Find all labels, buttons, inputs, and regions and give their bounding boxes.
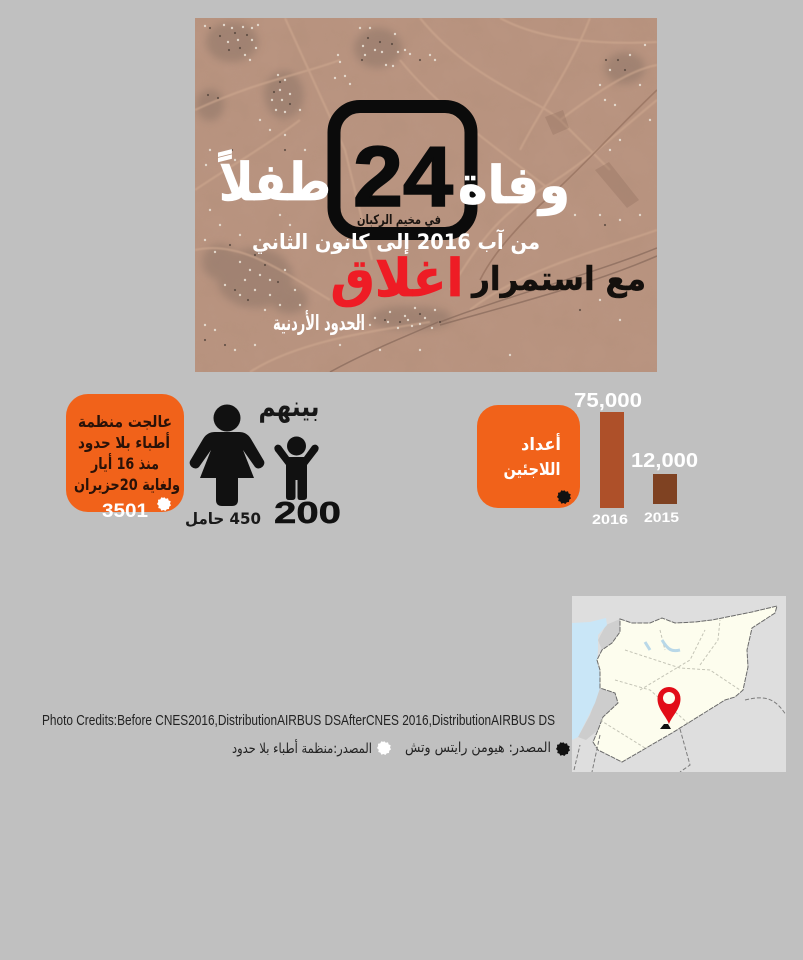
text: 200 children: 200 bbox=[274, 495, 341, 530]
number frame: rounded square with 24: 24 bbox=[353, 130, 453, 225]
panel: MSF treatment callout: منذ 16 أيار bbox=[90, 453, 159, 473]
panel: refugee numbers callout bbox=[477, 405, 580, 508]
panel: MSF treatment callout: عالجت منظمة bbox=[78, 412, 172, 431]
number frame: rounded square with 24 bbox=[334, 106, 471, 234]
text: in Rukban camp: في مخيم الركبان bbox=[357, 213, 441, 228]
location pin bbox=[657, 687, 681, 729]
text: date range: من آب 2016 إلى كانون الثاني bbox=[252, 229, 540, 254]
panel: map of Syria bbox=[572, 596, 786, 772]
heading: children: طفلاً bbox=[218, 149, 331, 213]
text: among them: بينهم bbox=[258, 390, 320, 423]
bar chart: refugees 2016 vs 2015: 2016 bbox=[592, 511, 628, 527]
legend: source MSF: المصدر:منظمة أطباء بلا حدود bbox=[232, 739, 372, 757]
text: photo credits: Photo Credits:Before CNES2016,DistributionAIRBUS DSAfterCNES 2016,DistributionAIRBUS DS bbox=[42, 712, 555, 729]
icon: child bbox=[274, 436, 319, 500]
heading: with continued: مع استمرار bbox=[470, 259, 646, 299]
sea bbox=[572, 618, 607, 740]
legend: source Human Rights Watch: المصدر: هيومن رايتس وتش bbox=[405, 740, 551, 756]
panel: MSF treatment callout: 3501 bbox=[102, 501, 148, 522]
Syria territory bbox=[593, 606, 777, 762]
bar chart: refugees 2016 vs 2015: 12,000 bbox=[631, 450, 698, 472]
text: Jordanian border: الحدود الأردنية bbox=[273, 309, 365, 335]
panel: MSF treatment callout bbox=[66, 394, 184, 522]
text: 450 pregnant: 450 حامل bbox=[185, 509, 261, 528]
panel: MSF treatment callout: أطباء بلا حدود bbox=[78, 432, 170, 452]
heading: deaths: وفاة bbox=[458, 156, 570, 216]
panel: refugee numbers callout: اللاجئين bbox=[504, 460, 560, 480]
panel: MSF treatment callout: ولغاية 20حزيران bbox=[74, 475, 180, 494]
icon: woman bbox=[190, 404, 264, 506]
panel: aerial photo of Rukban camp bbox=[195, 18, 657, 372]
bar chart: refugees 2016 vs 2015: 2015 bbox=[644, 509, 679, 525]
bar chart: refugees 2016 vs 2015: 75,000 bbox=[574, 390, 642, 412]
bar chart: refugees 2016 vs 2015 bbox=[574, 390, 698, 527]
panel: refugee numbers callout: أعداد bbox=[521, 433, 561, 455]
heading: closure: اغلاق bbox=[330, 249, 464, 309]
